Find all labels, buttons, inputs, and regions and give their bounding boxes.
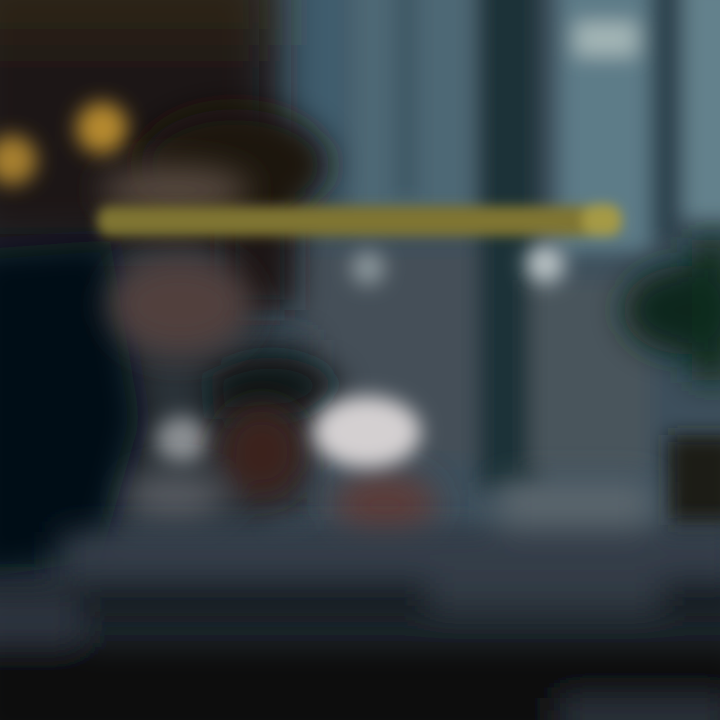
plant [623,240,720,380]
warm ceiling lights [0,102,128,185]
person: hair [140,109,330,310]
yellow highlight bar [97,204,622,236]
person: face [100,166,252,355]
plant pot [668,435,720,525]
hands and cup [125,404,437,539]
table [0,482,720,720]
lower torso shadow [120,340,310,520]
white cup [313,396,421,468]
person: dark jacket [0,240,345,580]
light reflections [156,244,565,464]
window background [270,0,720,530]
dark interior at upper left [0,0,275,250]
